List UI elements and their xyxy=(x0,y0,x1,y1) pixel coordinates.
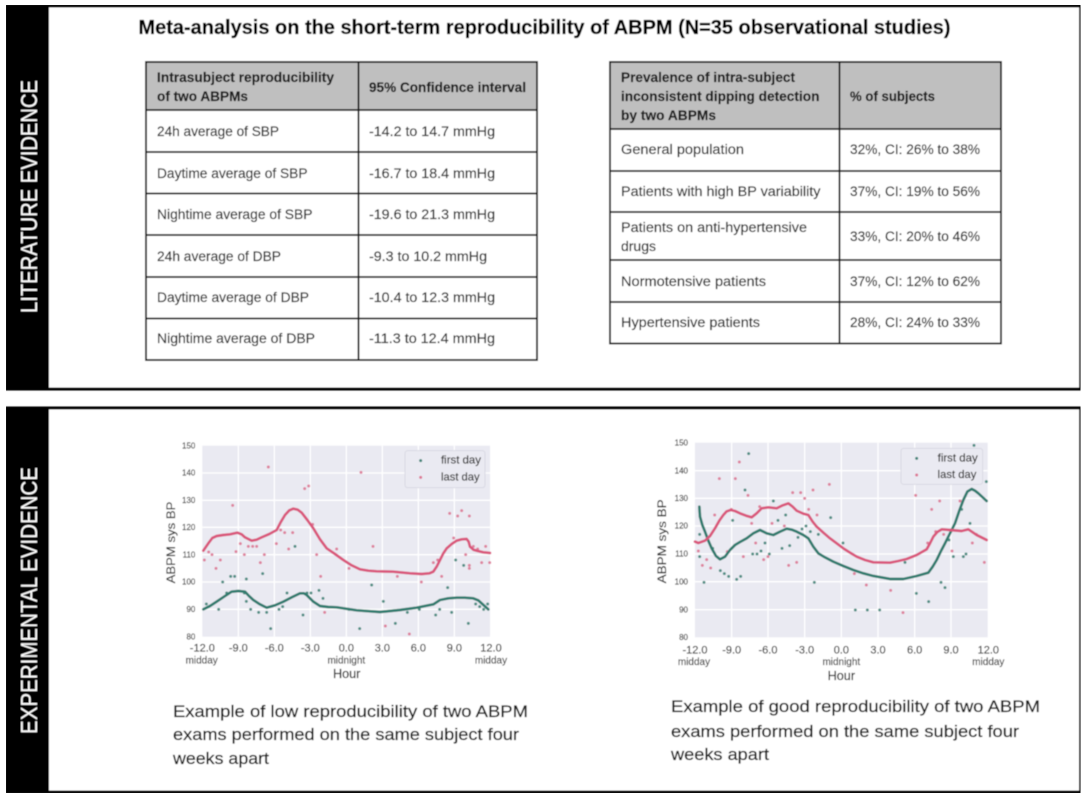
scatter: last day xyxy=(697,460,986,614)
table: intrasubject reproducibility xyxy=(146,62,537,360)
scatter: first day xyxy=(205,545,489,630)
table: intrasubject reproducibility: 24h average of DBP xyxy=(157,249,281,264)
caption: low reproducibility: Example of low reproducibility of two ABPM xyxy=(173,703,528,721)
y axis labels: 140 xyxy=(675,466,689,475)
table: intrasubject reproducibility: Daytime average of SBP xyxy=(157,166,308,181)
y axis labels: 150 xyxy=(675,438,689,447)
y axis labels: 150 xyxy=(182,441,196,450)
curve: first day xyxy=(699,489,987,579)
table: intrasubject reproducibility: of two ABPMs xyxy=(157,89,248,104)
x axis labels: 9.0 xyxy=(943,644,959,656)
y axis labels: 100 xyxy=(182,578,196,587)
x axis labels: midnight xyxy=(327,655,365,666)
caption: low reproducibility: exams performed on the same subject four xyxy=(173,726,520,744)
x axis labels: -6.0 xyxy=(759,644,777,656)
y axis labels: 100 xyxy=(675,577,689,586)
y axis labels: 90 xyxy=(186,605,196,614)
y axis labels: ABPM sys BP xyxy=(655,499,669,583)
legend: last day xyxy=(441,471,480,483)
caption: low reproducibility xyxy=(172,703,528,768)
table: intrasubject reproducibility: 95% Confidence interval xyxy=(369,80,526,95)
table: inconsistent dipping prevalence: 37%, CI: 19% to 56% xyxy=(850,184,980,199)
panel: literature evidence xyxy=(6,5,1080,390)
y axis labels: 130 xyxy=(675,494,689,503)
y axis labels xyxy=(164,441,196,641)
x axis labels: Hour xyxy=(828,669,855,683)
chart: good reproducibility example xyxy=(655,438,1004,683)
chart: low reproducibility example xyxy=(164,441,507,681)
sidebar: literature evidence xyxy=(6,5,49,390)
x axis labels: 6.0 xyxy=(411,643,426,655)
x axis labels: 6.0 xyxy=(907,644,922,656)
legend: first day xyxy=(938,452,978,464)
x axis labels: Hour xyxy=(333,667,360,681)
x axis labels: -9.0 xyxy=(722,644,741,656)
sidebar: experimental evidence xyxy=(6,407,49,793)
caption: good reproducibility: weeks apart xyxy=(670,746,769,764)
table: inconsistent dipping prevalence: Patients on anti-hypertensive xyxy=(621,220,807,235)
x axis labels: -9.0 xyxy=(229,643,248,655)
x axis labels: 3.0 xyxy=(870,644,886,656)
table: inconsistent dipping prevalence: 33%, CI: 20% to 46% xyxy=(850,229,980,244)
sidebar: literature evidence: LITERATURE EVIDENCE xyxy=(16,80,42,313)
table: intrasubject reproducibility: Intrasubject reproducibility xyxy=(157,70,334,85)
table: inconsistent dipping prevalence: Prevalence of intra-subject xyxy=(621,70,796,85)
table: intrasubject reproducibility: Nightime average of SBP xyxy=(157,207,312,222)
y axis labels: 110 xyxy=(675,550,689,559)
legend xyxy=(901,448,983,484)
x axis labels: -12.0 xyxy=(190,643,215,655)
table: inconsistent dipping prevalence: 37%, CI: 12% to 62% xyxy=(850,274,980,289)
y axis labels: 80 xyxy=(186,632,196,641)
x axis labels: -3.0 xyxy=(301,643,320,655)
table: intrasubject reproducibility: -11.3 to 12.4 mmHg xyxy=(369,331,495,346)
table: inconsistent dipping prevalence: drugs xyxy=(621,239,656,254)
scatter: last day xyxy=(203,465,491,635)
table: inconsistent dipping prevalence: inconsistent dipping detection xyxy=(621,89,820,104)
table: inconsistent dipping prevalence: Patients with high BP variability xyxy=(621,184,821,199)
y axis labels: 120 xyxy=(182,523,196,532)
table: intrasubject reproducibility: 24h average of SBP xyxy=(157,124,279,139)
x axis labels: 9.0 xyxy=(447,643,462,655)
table: inconsistent dipping prevalence: General population xyxy=(621,142,744,157)
x axis labels: midday xyxy=(186,655,218,666)
y axis labels: 140 xyxy=(182,469,196,478)
table: inconsistent dipping prevalence: 28%, CI: 24% to 33% xyxy=(850,315,980,330)
panel: experimental evidence xyxy=(6,407,1080,793)
table: intrasubject reproducibility: Nightime average of DBP xyxy=(157,331,315,346)
y axis labels: 120 xyxy=(675,522,689,531)
table: intrasubject reproducibility: -9.3 to 10.2 mmHg xyxy=(369,249,487,264)
table: inconsistent dipping prevalence: % of subjects xyxy=(850,89,935,104)
x axis labels: 3.0 xyxy=(375,643,390,655)
caption: good reproducibility: Example of good reproducibility of two ABPM xyxy=(671,698,1040,716)
x axis labels xyxy=(678,644,1004,683)
y axis labels: 110 xyxy=(183,550,196,559)
x axis labels: midday xyxy=(972,657,1004,668)
table: intrasubject reproducibility: -14.2 to 14.7 mmHg xyxy=(369,124,495,139)
table: intrasubject reproducibility: -19.6 to 21.3 mmHg xyxy=(369,207,495,222)
caption: low reproducibility: weeks apart xyxy=(172,750,269,768)
x axis labels: -12.0 xyxy=(682,644,708,656)
x axis labels: 12.0 xyxy=(978,644,999,656)
legend xyxy=(405,451,485,488)
curve: last day xyxy=(695,503,987,563)
table: intrasubject reproducibility: Daytime average of DBP xyxy=(157,290,309,305)
caption: good reproducibility: exams performed on the same subject four xyxy=(671,723,1020,741)
table: inconsistent dipping prevalence: by two ABPMs xyxy=(621,108,716,123)
x axis labels: midnight xyxy=(822,657,860,668)
x axis labels: midday xyxy=(678,657,710,668)
curve: first day xyxy=(203,591,488,612)
curve: last day xyxy=(203,509,490,574)
y axis labels xyxy=(655,438,689,642)
scatter: first day xyxy=(698,444,988,611)
y axis labels: 80 xyxy=(679,633,689,642)
table: inconsistent dipping prevalence: Normotensive patients xyxy=(621,274,766,289)
x axis labels: midday xyxy=(475,655,507,666)
caption: good reproducibility xyxy=(670,698,1040,764)
title: Meta-analysis on the short-term reproducibility of ABPM (N=35 observational studies) xyxy=(138,17,950,39)
y axis labels: 130 xyxy=(182,496,196,505)
x axis labels xyxy=(186,643,507,681)
table: intrasubject reproducibility: -10.4 to 12.3 mmHg xyxy=(369,290,495,305)
y axis labels: 90 xyxy=(679,605,689,614)
table: inconsistent dipping prevalence: Hypertensive patients xyxy=(621,315,760,330)
x axis labels: -3.0 xyxy=(795,644,814,656)
x axis labels: 12.0 xyxy=(480,643,502,655)
y axis labels: ABPM sys BP xyxy=(164,502,178,583)
table: inconsistent dipping prevalence xyxy=(610,62,1001,344)
sidebar: experimental evidence: EXPERIMENTAL EVIDENCE xyxy=(16,467,42,734)
table: intrasubject reproducibility: -16.7 to 18.4 mmHg xyxy=(369,166,495,181)
legend: first day xyxy=(441,455,482,467)
legend: last day xyxy=(938,469,977,481)
x axis labels: 0.0 xyxy=(339,643,354,655)
x axis labels: 0.0 xyxy=(834,644,849,656)
table: inconsistent dipping prevalence: 32%, CI: 26% to 38% xyxy=(850,142,980,157)
x axis labels: -6.0 xyxy=(265,643,284,655)
